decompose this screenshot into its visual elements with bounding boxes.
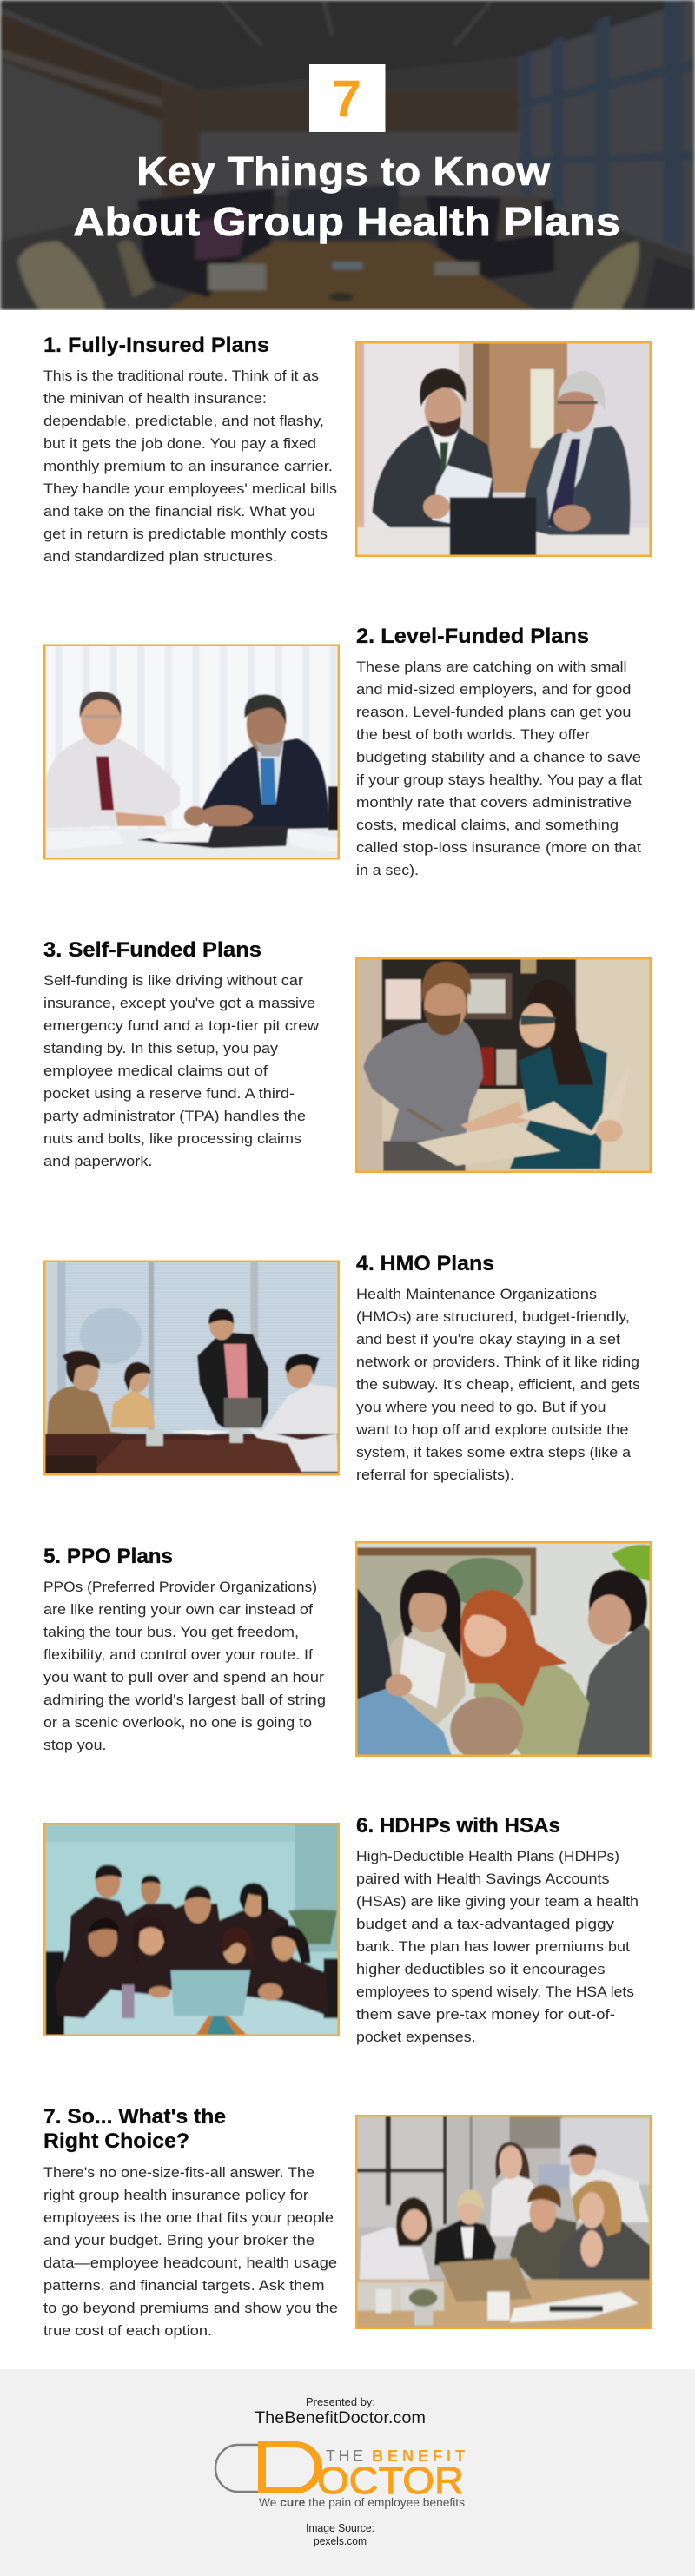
panel: 3. Self-Funded Plans xyxy=(43,938,652,1173)
heading: 1. Fully-Insured Plans xyxy=(43,334,269,357)
body text xyxy=(356,659,642,878)
body text xyxy=(356,1848,639,2045)
body text: stop you. xyxy=(43,1737,106,1753)
body text xyxy=(43,1579,326,1753)
body text: in a sec). xyxy=(356,862,419,878)
body text: This is the traditional route. Think of it as xyxy=(43,368,319,384)
body text: higher deductibles so it encourages xyxy=(356,1961,605,1977)
body text xyxy=(43,972,320,1169)
body text: right group health insurance policy for xyxy=(43,2187,308,2203)
heading xyxy=(43,2105,226,2153)
body text: them save pre-tax money for out-of- xyxy=(356,2006,615,2023)
body text: the subway. It's cheap, efficient, and gets xyxy=(356,1376,640,1393)
photo: man and woman reviewing documents xyxy=(355,957,652,1173)
title xyxy=(73,149,620,244)
body text: budgeting stability and a chance to save xyxy=(356,749,641,765)
heading: 4. HMO Plans xyxy=(356,1252,494,1275)
number badge: 7 xyxy=(332,70,361,128)
image source credit: pexels.com xyxy=(314,2534,367,2547)
body text: are like renting your own car instead of xyxy=(43,1601,313,1618)
body text: paired with Health Savings Accounts xyxy=(356,1871,610,1887)
panel: 7. So... What's the Right Choice? xyxy=(43,2105,652,2339)
hero banner xyxy=(0,0,695,310)
body text: true cost of each option. xyxy=(43,2322,212,2339)
body text: the best of both worlds. They offer xyxy=(356,726,590,743)
body text: the minivan of health insurance: xyxy=(43,390,267,407)
body text: These plans are catching on with small xyxy=(356,659,627,675)
body text: flexibility, and control over your route. If xyxy=(43,1646,313,1663)
photo: colleagues laughing xyxy=(355,1541,652,1762)
body text: called stop-loss insurance (more on that xyxy=(356,839,641,856)
presented by: Presented by: xyxy=(306,2395,375,2408)
body text: monthly premium to an insurance carrier. xyxy=(43,458,333,474)
body text: employees to spend wisely. The HSA lets xyxy=(356,1983,634,2000)
body text xyxy=(43,2164,338,2339)
heading: 6. HDHPs with HSAs xyxy=(356,1814,560,1838)
heading: 2. Level-Funded Plans xyxy=(356,625,589,648)
body text: you want to pull over and spend an hour xyxy=(43,1669,324,1685)
body text: budget and a tax-advantaged piggy xyxy=(356,1916,615,1932)
body text: Health Maintenance Organizations xyxy=(356,1286,597,1302)
body text: or a scenic overlook, no one is going to xyxy=(43,1714,312,1731)
body text: want to hop off and explore outside the xyxy=(355,1421,629,1438)
body text: you where you need to go. But if you xyxy=(356,1399,606,1415)
body text: employee medical claims out of xyxy=(43,1063,268,1079)
photo: group around a laptop xyxy=(43,1823,340,2036)
body text xyxy=(355,1286,640,1483)
body text: (HSAs) are like giving your team a health xyxy=(356,1893,639,1910)
body text: get in return is predictable monthly costs xyxy=(43,526,328,542)
logo: The Benefit Doctor: BENEFIT xyxy=(372,2447,465,2465)
footer xyxy=(0,2369,695,2576)
body text: pocket expenses. xyxy=(356,2029,476,2045)
panel: 1. Fully-Insured Plans xyxy=(43,334,652,565)
body text: standing by. In this setup, you pay xyxy=(43,1040,279,1056)
body text: patterns, and financial targets. Ask them xyxy=(43,2277,324,2294)
body text: but it gets the job done. You pay a fixed xyxy=(43,435,316,452)
hero photo: dark meeting room xyxy=(0,0,695,310)
body text: They handle your employees' medical bills xyxy=(43,480,337,497)
body text: There's no one-size-fits-all answer. The xyxy=(43,2164,314,2181)
heading: Right Choice? xyxy=(43,2129,189,2153)
body text: bank. The plan has lower premiums but xyxy=(356,1938,630,1955)
body text: Self-funding is like driving without car xyxy=(43,972,303,989)
body text: and take on the financial risk. What you xyxy=(43,503,315,520)
body text: admiring the world's largest ball of string xyxy=(43,1692,326,1708)
body text: monthly rate that covers administrative xyxy=(356,794,632,811)
body text: and standardized plan structures. xyxy=(43,548,277,565)
body text: to go beyond premiums and show you the xyxy=(43,2300,338,2316)
body text: and your budget. Bring your broker the xyxy=(43,2232,314,2248)
heading: 5. PPO Plans xyxy=(43,1545,173,1568)
photo: team meeting by window blinds xyxy=(43,1260,340,1475)
image source credit: Image Source: xyxy=(306,2521,374,2534)
panel: 5. PPO Plans xyxy=(43,1541,652,1762)
photo: team celebrating around a laptop xyxy=(355,2115,652,2329)
heading: 7. So... What's the xyxy=(43,2105,226,2129)
logo: The Benefit Doctor xyxy=(215,2441,465,2509)
body text: nuts and bolts, like processing claims xyxy=(43,1130,301,1147)
number badge xyxy=(309,64,386,132)
logo: The Benefit Doctor: We cure the pain of employee benefits xyxy=(259,2496,465,2509)
body text: dependable, predictable, and not flashy, xyxy=(43,413,324,429)
panel: 4. HMO Plans xyxy=(43,1252,640,1483)
body text: PPOs (Preferred Provider Organizations) xyxy=(43,1579,317,1595)
photo: two executives at a desk xyxy=(43,645,340,860)
website: TheBenefitDoctor.com xyxy=(255,2409,426,2427)
body text: and mid-sized employers, and for good xyxy=(356,681,631,698)
body text: reason. Level-funded plans can get you xyxy=(356,704,631,720)
logo: The Benefit Doctor: OCTOR xyxy=(317,2460,464,2502)
body text: taking the tour bus. You get freedom, xyxy=(43,1624,299,1640)
body text: employees is the one that fits your people xyxy=(43,2209,334,2226)
body text xyxy=(43,368,337,565)
heading: 3. Self-Funded Plans xyxy=(43,938,261,962)
body text: network or providers. Think of it like riding xyxy=(356,1354,639,1370)
image source credit xyxy=(306,2521,374,2547)
body text: emergency fund and a top-tier pit crew xyxy=(43,1017,320,1034)
body text: (HMOs) are structured, budget-friendly, xyxy=(356,1308,630,1325)
body text: party administrator (TPA) handles the xyxy=(43,1108,306,1124)
body text: pocket using a reserve fund. A third- xyxy=(43,1085,295,1102)
title: About Group Health Plans xyxy=(73,199,620,244)
panel: 6. HDHPs with HSAs xyxy=(43,1814,639,2045)
body text: and paperwork. xyxy=(43,1153,153,1169)
body text: insurance, except you've got a massive xyxy=(43,995,315,1011)
body text: if your group stays healthy. You pay a flat xyxy=(356,771,642,788)
logo: The Benefit Doctor: THE xyxy=(326,2447,363,2465)
body text: costs, medical claims, and something xyxy=(356,817,619,833)
panel: 2. Level-Funded Plans xyxy=(43,625,642,878)
body text: and best if you're okay staying in a set xyxy=(356,1331,620,1348)
body text: referral for specialists). xyxy=(356,1467,514,1483)
body text: High-Deductible Health Plans (HDHPs) xyxy=(356,1848,619,1864)
title: Key Things to Know xyxy=(136,149,550,194)
body text: data—employee headcount, health usage xyxy=(43,2255,337,2271)
body text: system, it takes some extra steps (like a xyxy=(356,1444,632,1460)
photo: two businessmen with tablet xyxy=(355,341,652,557)
